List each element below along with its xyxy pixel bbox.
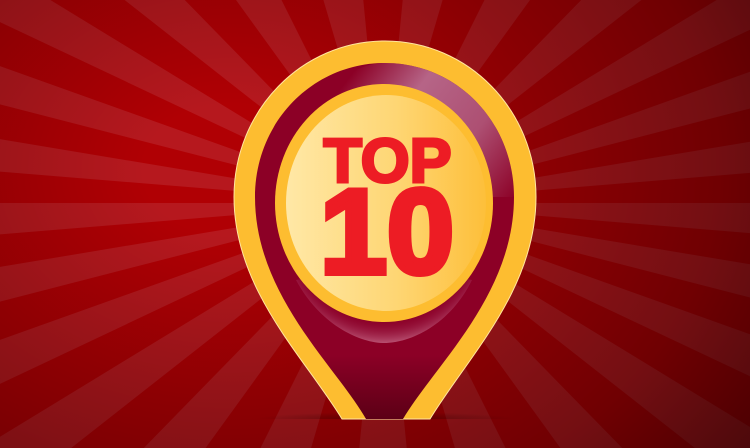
ground shadow xyxy=(256,405,516,419)
circle yellow ring xyxy=(275,84,493,322)
title: 10: 10 xyxy=(320,165,454,299)
circle inner face xyxy=(286,95,486,311)
title: TOP: TOP xyxy=(324,127,452,196)
pin maroon body xyxy=(255,63,514,419)
pin outer yellow shell xyxy=(234,41,536,419)
bottom crescent highlight xyxy=(296,260,472,343)
gloss on maroon ring xyxy=(330,63,514,197)
